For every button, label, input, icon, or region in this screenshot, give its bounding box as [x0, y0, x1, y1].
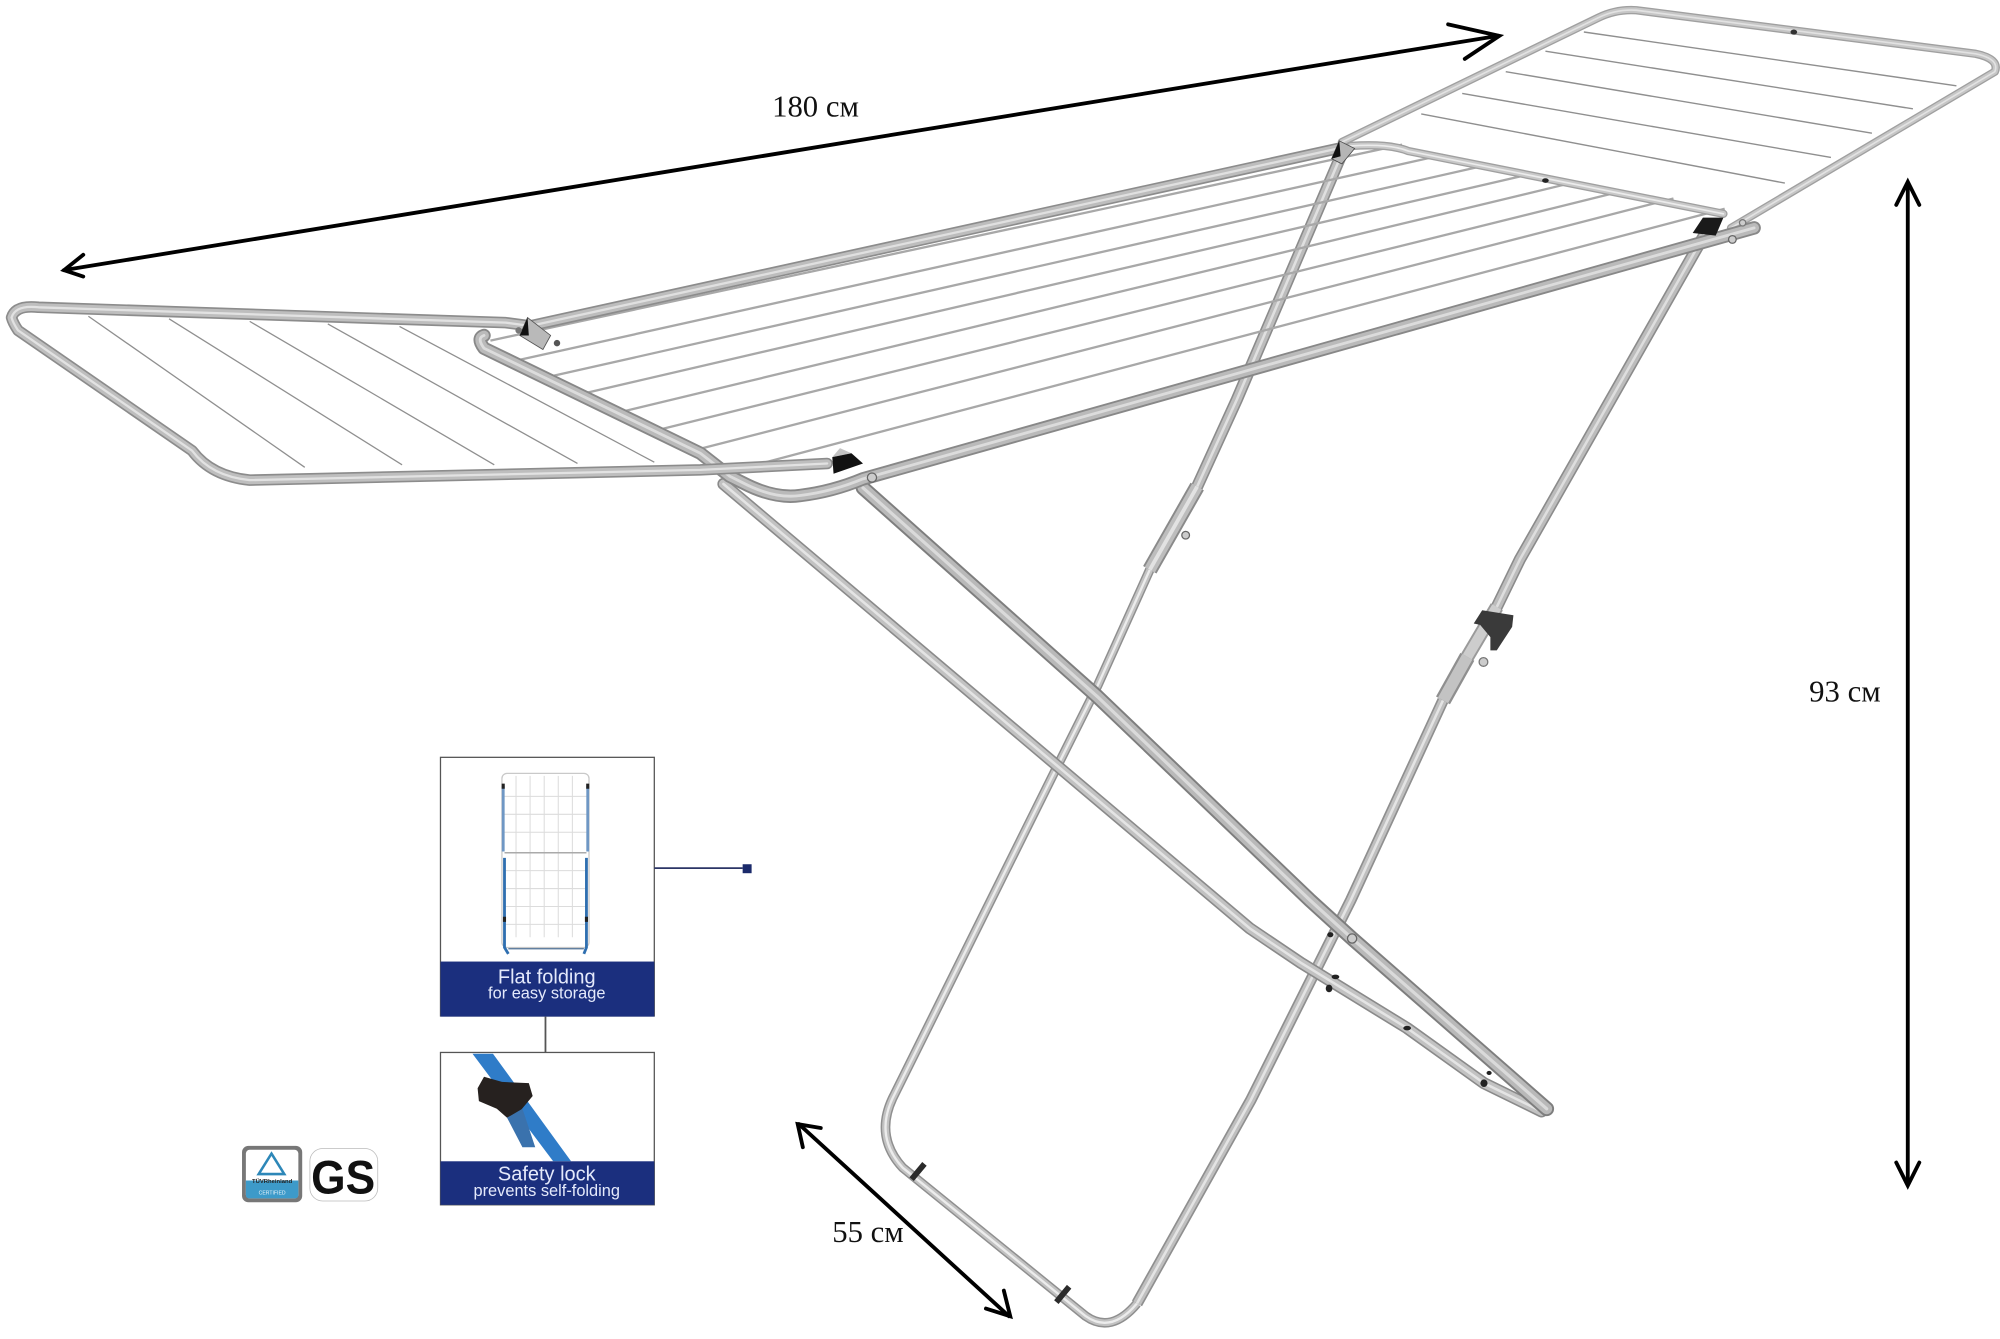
- hinges and fittings: [515, 29, 1797, 1302]
- caption band: safety lock: Safety lock: [498, 1163, 597, 1185]
- connector between panels: [544, 1017, 546, 1052]
- badge: TUV certification: TÜVRheinland: [252, 1178, 293, 1185]
- label: 55 cm: 55 см: [832, 1215, 904, 1249]
- badge: TUV certification: CERTIFIED: [259, 1191, 286, 1197]
- arrow: height 93 cm: [1896, 182, 1919, 1186]
- left wing wires: [88, 316, 654, 467]
- right wing frame: [1342, 10, 1996, 228]
- arrow: width 180 cm: [64, 24, 1499, 277]
- caption band: safety lock: prevents self-folding: [473, 1182, 620, 1200]
- arrow: depth 55 cm: [798, 1124, 1010, 1316]
- icon: folded rack: [502, 773, 589, 954]
- caption band: safety lock: [440, 1161, 654, 1205]
- caption band: flat folding: [440, 962, 654, 1017]
- right wing wires: [1421, 32, 1956, 183]
- caption band: flat folding: for easy storage: [488, 985, 605, 1003]
- connector to rack: [654, 864, 752, 873]
- rear leg frame with locking sections: [885, 154, 1705, 1323]
- main frame rails: [480, 145, 1754, 496]
- main drying wires: [490, 145, 1725, 462]
- caption band: flat folding: Flat folding: [498, 966, 596, 988]
- front leg tubes: [723, 484, 1547, 1111]
- panel: flat folding: [440, 757, 654, 1017]
- label: 180 cm: 180 см: [772, 90, 859, 124]
- left wing frame: [12, 307, 827, 480]
- panel: safety lock: [440, 1052, 654, 1205]
- label: 93 cm: 93 см: [1809, 675, 1881, 709]
- badge: GS mark: GS: [311, 1151, 375, 1204]
- badge: TUV certification: [242, 1146, 302, 1202]
- icon: safety lock clamp: [472, 1054, 571, 1161]
